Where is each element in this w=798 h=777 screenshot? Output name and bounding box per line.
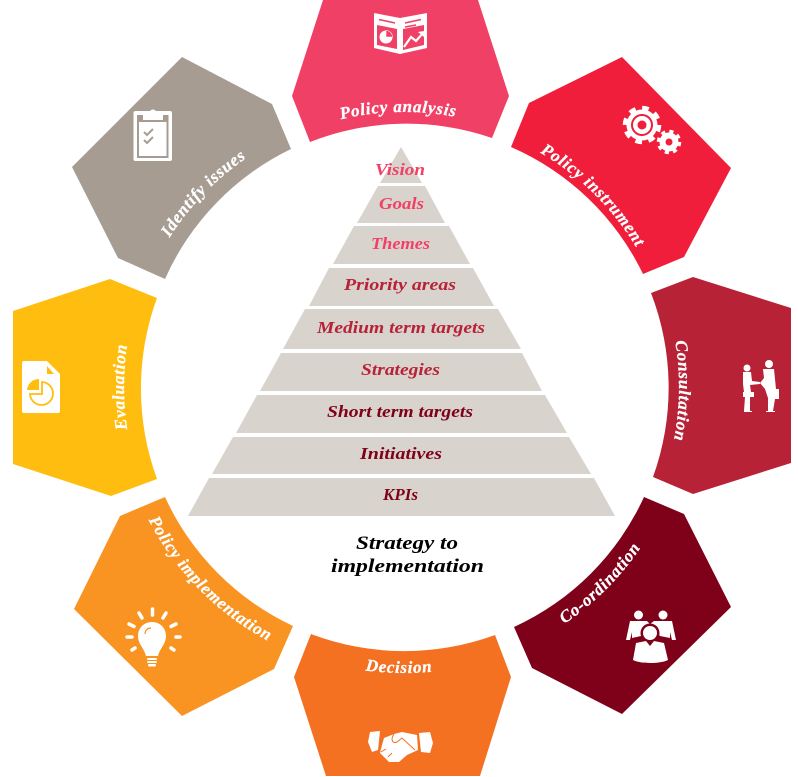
label: policy analysis: Policy analysis [340,100,456,120]
label: decision: Decision [365,660,432,674]
panel: decision [294,634,511,776]
tier: KPIs: KPIs [382,485,418,504]
icon: report with charts [374,13,427,54]
tier: vision [375,147,425,183]
tier: medium term targets [283,309,521,349]
tier: goals: Goals [379,194,424,213]
icon: document with pie chart [22,361,60,413]
panel: consultation [651,277,791,494]
tier: short term targets [236,395,567,433]
title: implementation [331,556,484,577]
tier: medium term targets: Medium term targets [316,318,485,337]
panel: policy instrument [511,57,731,274]
label: evaluation: Evaluation [112,345,128,430]
tier: strategies [260,353,542,391]
title [331,533,484,577]
tier: strategies: Strategies [361,360,440,379]
icon: gears [625,108,680,152]
label: consultation: Consultation [674,340,692,440]
tier: priority areas [309,268,494,306]
tier: initiatives: Initiatives [359,444,442,463]
icon: handshake [368,731,433,762]
icon: clipboard checklist [134,110,172,161]
icon: light bulb [127,609,180,666]
tier: themes [333,226,470,264]
icon: team of people [626,610,676,663]
panel: policy analysis [292,0,509,142]
tier: short term targets: Short term targets [327,402,473,421]
tier: KPIs [188,478,615,516]
tier: priority areas: Priority areas [343,275,456,294]
tier: themes: Themes [371,234,430,253]
panel: identify issues [72,57,291,279]
label: policy implementation: Policy implementation [148,516,270,640]
panel: co-ordination [514,497,731,714]
panel: policy implementation [74,497,293,716]
label: co-ordination: Co-ordination [560,544,640,622]
tier: vision: Vision [375,160,425,179]
tier: initiatives [212,437,591,474]
icon: business people shaking hands [743,360,779,412]
tier: goals [357,186,445,223]
label: identify issues: Identify issues [160,152,244,238]
title: Strategy to [356,533,458,554]
panel: evaluation [13,279,157,496]
pyramid [188,147,615,516]
label: policy instrument: Policy instrument [540,144,644,247]
